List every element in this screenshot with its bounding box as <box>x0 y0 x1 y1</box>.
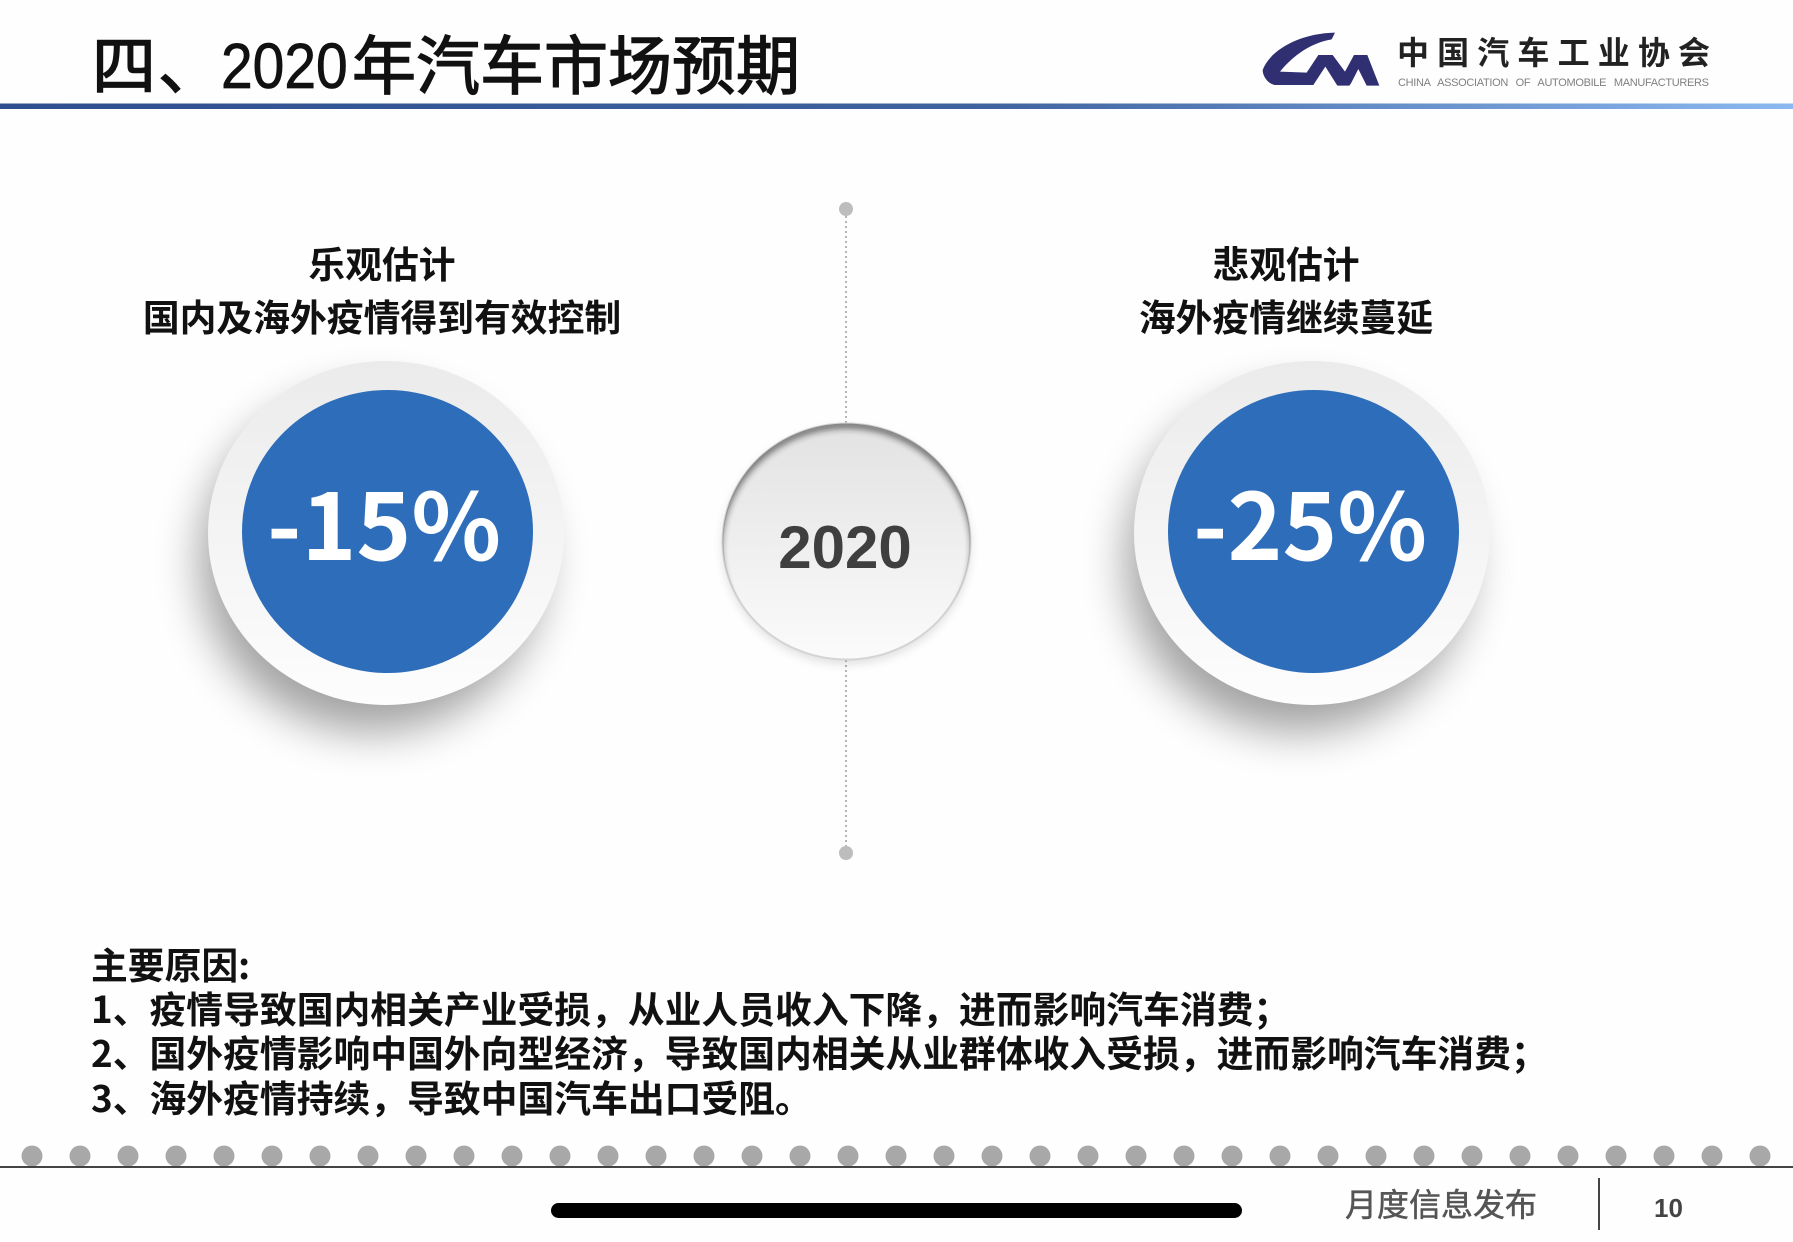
optimistic circle shadow <box>200 392 544 732</box>
timeline bottom dot <box>839 846 853 860</box>
footer divider <box>1598 1178 1600 1230</box>
pessimistic circle shadow <box>1126 392 1470 732</box>
main reasons text: 1、疫情导致国内相关产业受损，从业人员收入下降，进而影响汽车消费； <box>91 980 1290 1034</box>
logo Chinese name: 中国汽车工业协会 <box>1397 28 1710 74</box>
main reasons text: 主要原因: <box>91 936 250 990</box>
logo mark: CAM <box>1263 33 1379 86</box>
title prefix: 、 <box>158 16 222 108</box>
logo English name: CHINA ASSOCIATION OF AUTOMOBILE MANUFACTURERS <box>1398 77 1709 89</box>
timeline lower dotted line <box>845 660 847 847</box>
footer label: 月度信息发布 <box>1345 1180 1537 1226</box>
badge disc <box>722 424 970 660</box>
title year: 2020 <box>221 30 348 102</box>
panel: pessimistic estimate <box>1126 235 1490 732</box>
black progress pill <box>551 1203 1242 1218</box>
pessimistic value: -25% <box>1193 454 1427 587</box>
badge soft shadow <box>722 428 970 664</box>
main reasons text: 3、海外疫情持续，导致中国汽车出口受阻。 <box>91 1069 812 1123</box>
main reasons text: 2、国外疫情影响中国外向型经济，导致国内相关从业群体收入受损，进而影响汽车消费； <box>91 1024 1548 1078</box>
optimistic blue disc <box>242 390 533 673</box>
pessimistic outer ring <box>1134 361 1490 705</box>
logo: China Association of Automobile Manufacturers <box>1263 28 1710 89</box>
optimistic heading: 国内及海外疫情得到有效控制 <box>143 288 621 342</box>
badge inner shadow <box>722 424 970 597</box>
timeline upper dotted line <box>845 216 847 424</box>
title <box>92 16 800 108</box>
optimistic value: -15% <box>267 454 501 587</box>
optimistic outer ring <box>208 361 564 705</box>
pessimistic heading: 悲观估计 <box>1212 235 1360 289</box>
footer rule <box>0 1166 1793 1168</box>
pessimistic heading: 海外疫情继续蔓延 <box>1139 288 1433 342</box>
badge year: 2020 <box>778 514 912 581</box>
footer dot row <box>22 1146 1770 1166</box>
title remainder: 年汽车市场预期 <box>352 16 800 108</box>
page number: 10 <box>1654 1193 1683 1223</box>
timeline top dot <box>839 202 853 216</box>
panel: optimistic estimate <box>143 235 621 732</box>
center year badge <box>718 424 974 673</box>
center timeline <box>839 202 853 860</box>
pessimistic blue disc <box>1168 390 1459 673</box>
header rule <box>0 104 1793 109</box>
optimistic heading: 乐观估计 <box>308 235 456 289</box>
title prefix: 四 <box>92 16 156 108</box>
